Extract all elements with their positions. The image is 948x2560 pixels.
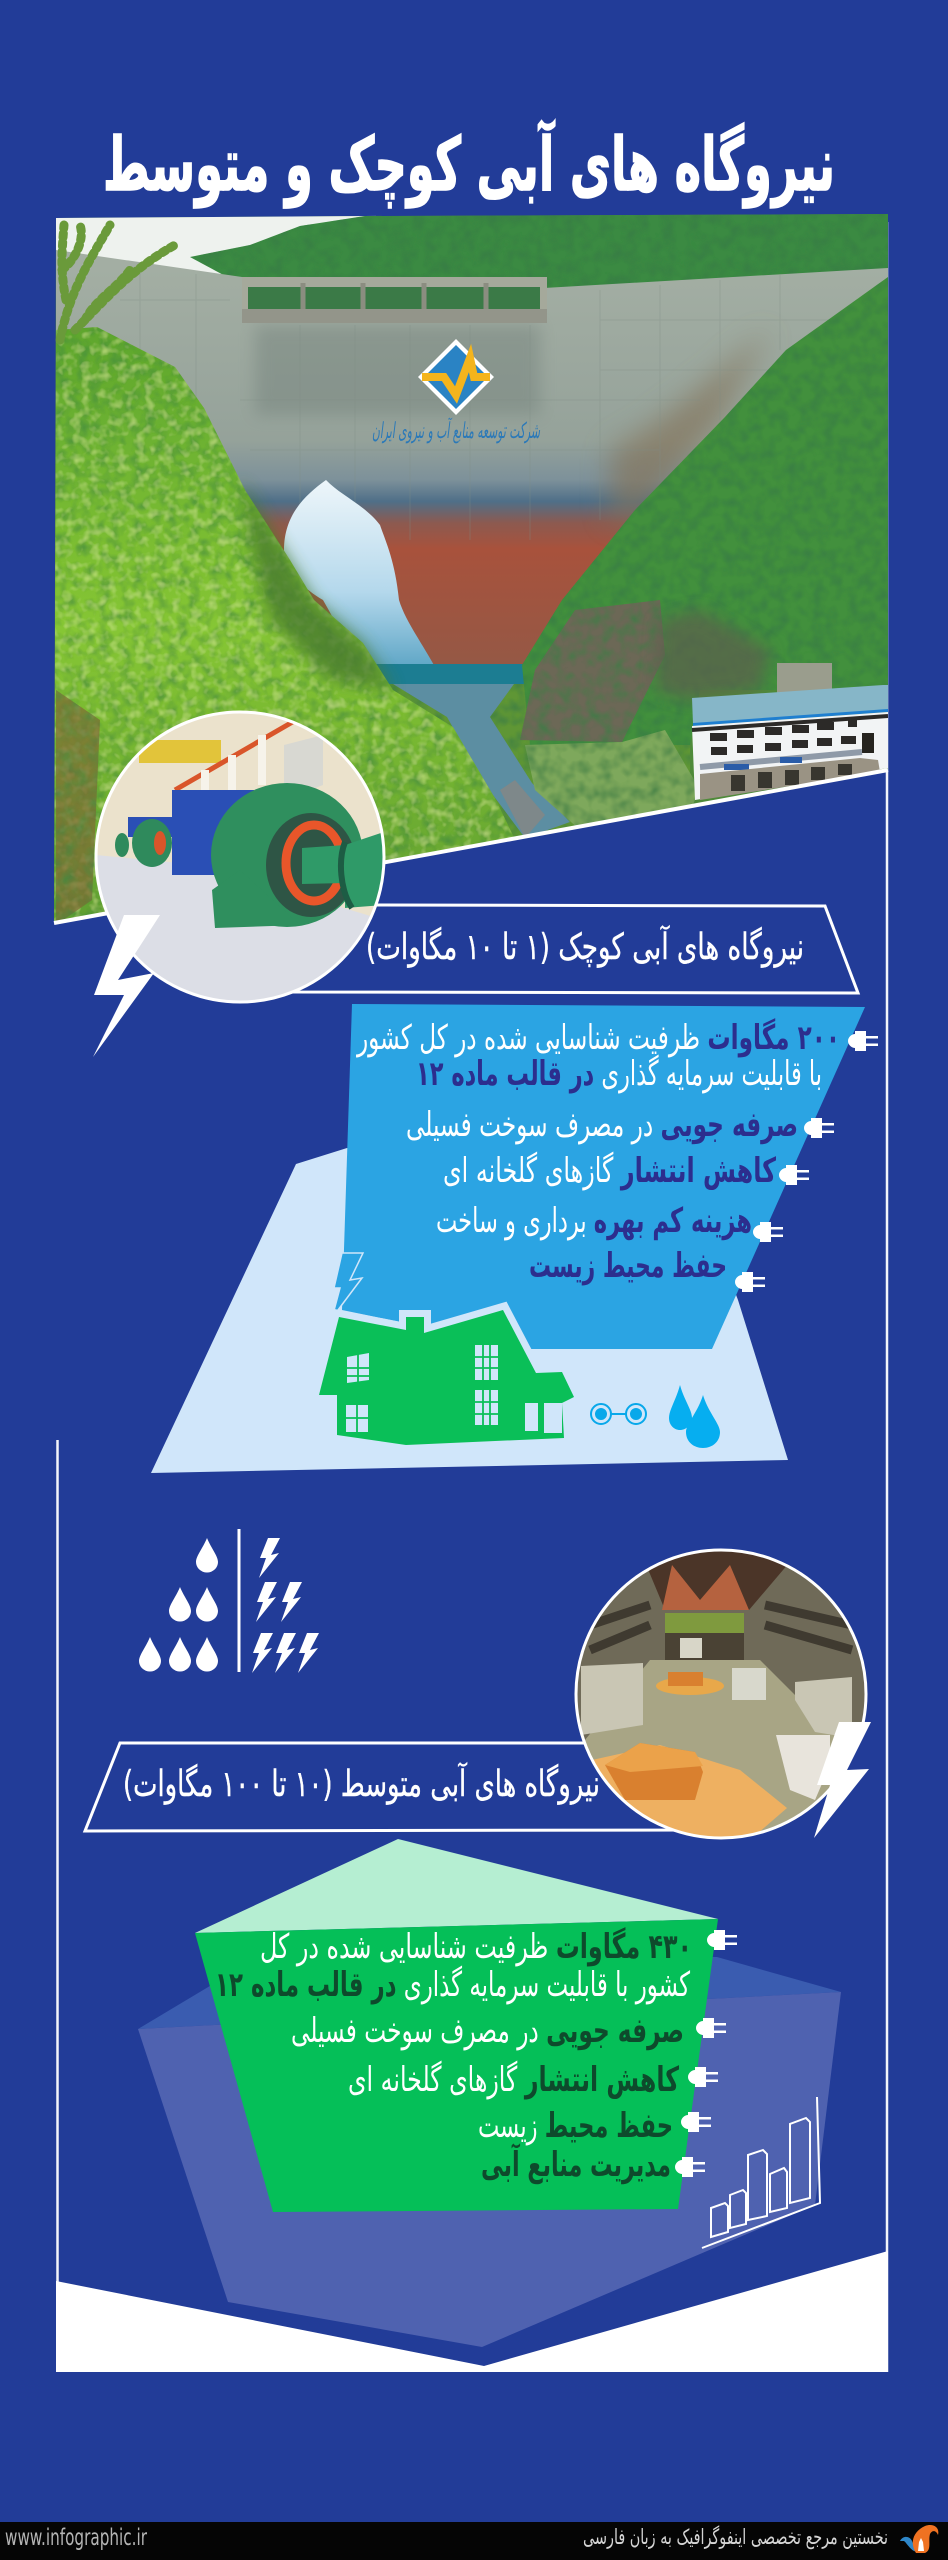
forest behind the dam [190, 214, 888, 288]
waterfall [284, 480, 435, 667]
lower bank [389, 684, 690, 836]
small orange unit [656, 1677, 724, 1695]
medium plant benefits list: کشور با قابلیت سرمایه گذاری در قالب ماده ۱۲ [215, 1965, 691, 2005]
cabinets [581, 1663, 643, 1735]
small plant benefits list: صرفه جویی در مصرف سوخت فسیلی [406, 1105, 798, 1145]
windows [284, 736, 323, 788]
crane [139, 740, 221, 763]
light blue backdrop [151, 1148, 788, 1473]
icon: water drops [669, 1385, 720, 1448]
sky [56, 214, 376, 274]
lightning bolt left [93, 915, 160, 1057]
pipe [302, 832, 384, 908]
dam logo [372, 339, 540, 444]
small plant benefits list: کاهش انتشار گازهای گلخانه ای [443, 1151, 776, 1191]
small plant banner [296, 905, 858, 993]
lower left brown earth [56, 690, 100, 925]
floor [96, 855, 384, 1005]
small turbines [132, 819, 172, 867]
bank rocks [500, 780, 545, 838]
rock face [520, 600, 665, 742]
right hillside [522, 277, 888, 745]
white crate [776, 1735, 830, 1800]
dam stain right [610, 330, 770, 520]
left hillside foliage [54, 327, 520, 930]
medium plant heading: نیروگاه های آبی متوسط (۱۰ تا ۱۰۰ مگاوات) [123, 1761, 600, 1805]
small plant benefits list: با قابلیت سرمایه گذاری در قالب ماده ۱۲ [416, 1054, 822, 1094]
small plant info panel [342, 1004, 865, 1349]
floor [585, 1660, 834, 1831]
small plant heading: نیروگاه های آبی کوچک (۱ تا ۱۰ مگاوات) [366, 924, 804, 968]
plug icons, medium plant [675, 1930, 737, 2177]
river [393, 684, 570, 838]
footer url: www.infographic.ir [5, 2525, 147, 2551]
bottom white band [56, 2251, 888, 2372]
upper left tree branches [60, 225, 175, 340]
lower right meadow [525, 730, 700, 830]
blue generators [172, 790, 254, 875]
power house building [692, 663, 888, 800]
spillway gallery [242, 277, 547, 323]
medium plant info panel [195, 1919, 718, 2212]
icon: connector [591, 1404, 646, 1424]
circle photo: medium plant hall [575, 1548, 867, 1840]
back polygon front [138, 1992, 841, 2347]
wall arches [590, 1605, 852, 1650]
content frame border lines [58, 222, 887, 2372]
icon: small lightning [332, 1253, 363, 1318]
medium plant benefits list: کاهش انتشار گازهای گلخانه ای [348, 2060, 679, 2100]
medium plant benefits list [215, 1927, 692, 2185]
hero photo: dam and power station: شرکت توسعه منابع آب و نیروی ایران [372, 417, 540, 444]
circle photo: small plant turbines [96, 710, 386, 1005]
icon: 3D bar chart [702, 2097, 820, 2248]
medium plant benefits list: حفظ محیط زیست [478, 2106, 673, 2146]
pool [375, 664, 525, 684]
footer logo [900, 2525, 938, 2553]
lightning bolt right [814, 1722, 871, 1838]
mint roof [195, 1839, 718, 1933]
beam [175, 720, 296, 790]
footer bar [0, 2522, 948, 2560]
medium plant benefits list: ۴۳۰ مگاوات ظرفیت شناسایی شده در کل [260, 1927, 692, 1967]
medium plant banner [85, 1743, 700, 1831]
darker slope strip [240, 480, 393, 690]
icon: green house [319, 1310, 574, 1445]
dam joints [120, 270, 840, 540]
hero photo bottom white edge [54, 770, 888, 923]
medium plant benefits list: مدیریت منابع آبی [481, 2143, 671, 2185]
scale pictogram: drops versus lightning [139, 1529, 319, 1673]
ceiling [648, 1552, 786, 1610]
small plant benefits list: حفظ محیط زیست [529, 1246, 727, 1286]
large turbine [211, 783, 363, 927]
small plant benefits list: هزینه کم بهره برداری و ساخت [436, 1201, 752, 1241]
back polygon upper [138, 1950, 841, 2029]
small plant benefits list: ۲۰۰ مگاوات ظرفیت شناسایی شده در کل کشور [356, 1018, 840, 1058]
hero photo: dam and power station [54, 214, 888, 930]
medium plant benefits list: صرفه جویی در مصرف سوخت فسیلی [291, 2011, 684, 2051]
small plant benefits list [356, 1018, 840, 1286]
dam stains centre [255, 325, 540, 415]
end wall [665, 1613, 744, 1633]
large orange unit [605, 1743, 703, 1800]
concrete dam wall [56, 250, 888, 700]
rock patch right [655, 610, 770, 700]
orange floor disc [585, 1745, 787, 1840]
pillars [205, 735, 262, 795]
plug icons, small plant [735, 1031, 878, 1292]
photo base [54, 214, 888, 926]
